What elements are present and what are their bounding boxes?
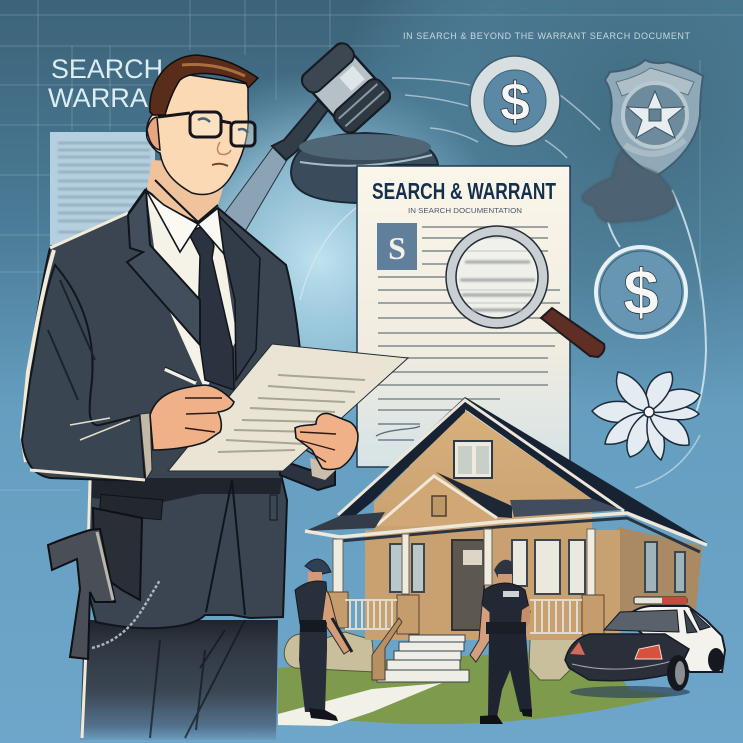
left arm sleeve [22,265,145,481]
S seal box [377,223,417,270]
connecting swooshes [300,78,706,488]
step rail [372,618,402,680]
dollar coin top [470,56,560,146]
collar [146,190,224,254]
left hand [150,385,234,450]
upper gable wall [374,410,592,530]
door [452,540,484,630]
dollar coin top: $ [500,72,530,132]
police badge [605,60,703,176]
gloved hand holding badge [582,150,675,223]
head [147,72,248,195]
neck [147,160,230,222]
chain [92,580,160,648]
gavel head [298,40,394,136]
glasses [158,112,255,146]
police officer left [295,559,352,721]
warrant document [357,166,570,467]
held paper [168,344,408,471]
gavel base [291,133,438,203]
signature [376,424,420,440]
lapels [127,190,200,345]
S seal box: S [388,230,406,266]
dollar coin right: $ [623,256,659,328]
left heading: search warrant: WARRA [48,83,148,113]
right wing wall [618,527,702,612]
main roof [465,397,709,544]
document title: SEARCH & WARRANT [372,178,556,204]
pistol [48,529,115,659]
faded background document [50,132,155,245]
walkway [278,683,442,726]
porch wall [365,530,620,640]
front gable [377,476,497,526]
document text lines [378,227,560,410]
dollar coin right [596,247,686,337]
gable vent [432,496,446,516]
front steps [377,635,469,682]
main figure: man in suit [22,55,408,740]
shirt cuff [140,413,152,480]
pedestals [328,592,604,635]
magnifying glass [446,226,604,357]
railings [345,600,582,633]
upper window [454,441,492,478]
gavel [218,40,438,240]
jacket seams [206,480,245,615]
dark band under paper [92,478,282,505]
columns [333,529,595,595]
suit jacket torso [22,190,300,628]
belt and holster [93,494,163,600]
tie [188,225,234,390]
document subtitle: IN SEARCH DOCUMENTATION [408,208,522,215]
trousers [80,620,278,740]
shirt [146,190,237,390]
face features [198,118,248,133]
windows [390,540,685,594]
porch roof and left eave [305,512,385,531]
lower roof [436,472,512,518]
right sleeve [280,460,335,490]
left heading: search warrant [48,54,163,113]
bushes [284,629,580,680]
police officer right [470,560,532,724]
top small text: IN SEARCH & BEYOND THE WARRANT SEARCH DOCUMENT [403,31,690,41]
left heading: search warrant: SEARCH [51,54,163,84]
pen [165,369,196,383]
right hand [295,413,358,470]
flower [592,372,700,460]
house [278,397,709,726]
hair [150,55,258,115]
police car [565,597,725,698]
lawn [278,650,675,724]
